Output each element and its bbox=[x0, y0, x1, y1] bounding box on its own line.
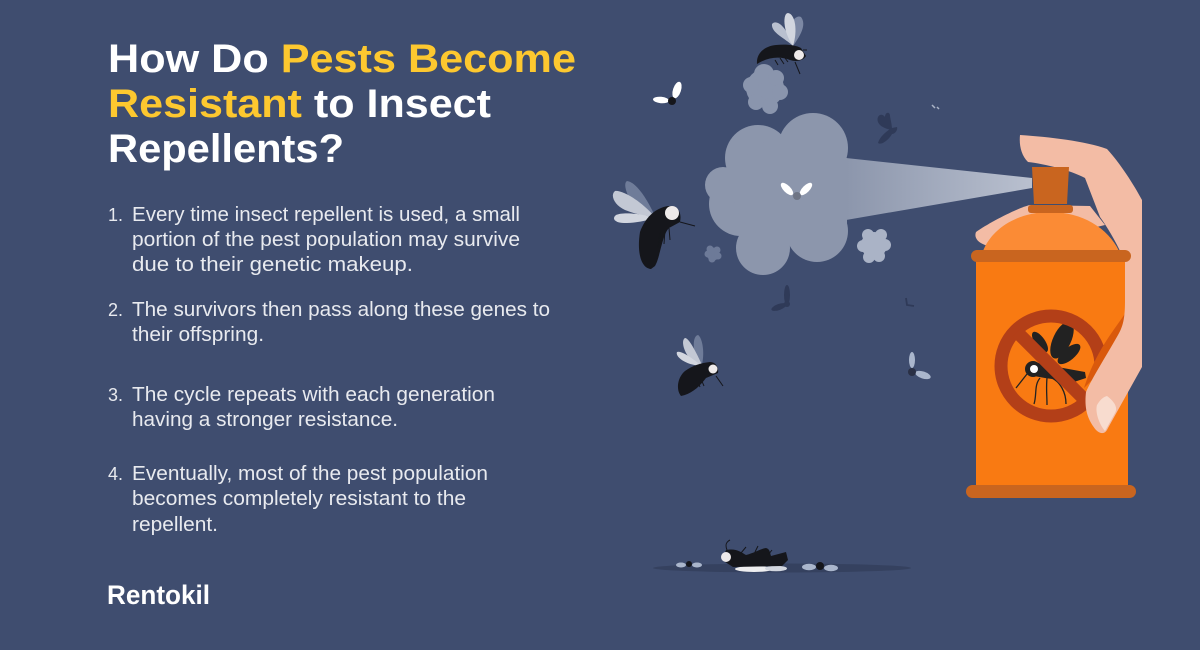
step 3 text: having a stronger resistance. bbox=[132, 409, 398, 431]
tiny dark fly bbox=[906, 298, 914, 306]
spray cloud and cone bbox=[705, 113, 1032, 275]
collar bbox=[1028, 205, 1073, 213]
dead fly right bbox=[802, 562, 838, 571]
step 1 text: 1. bbox=[108, 205, 123, 225]
title bbox=[108, 37, 576, 171]
title: How Do Pests Become bbox=[108, 37, 576, 81]
step 2 text: 2. bbox=[108, 300, 123, 320]
fingernail bbox=[1096, 396, 1116, 431]
fly right bbox=[908, 352, 932, 381]
can base bbox=[966, 485, 1136, 498]
mosquito left large bbox=[613, 181, 695, 269]
dark fly faded middle bbox=[770, 285, 790, 313]
can ring bbox=[971, 250, 1131, 262]
step 1 text: due to their genetic makeup. bbox=[132, 254, 413, 276]
hand front bbox=[1020, 135, 1142, 433]
fly white small bbox=[653, 81, 683, 105]
step 4 text: 4. bbox=[108, 464, 123, 484]
step 2 text: The survivors then pass along these genes to bbox=[132, 299, 550, 321]
step 3 text: The cycle repeats with each generation bbox=[132, 384, 495, 406]
finger shadow on can bbox=[1084, 312, 1127, 388]
fly inside cloud bbox=[779, 181, 814, 200]
dark fly faded top bbox=[878, 113, 897, 144]
small cloud right bbox=[857, 229, 891, 263]
title: Resistant to Insect bbox=[108, 82, 491, 126]
step 4 text: repellent. bbox=[132, 514, 218, 536]
mosquito top bbox=[757, 13, 807, 74]
step 3 text: 3. bbox=[108, 385, 123, 405]
step 1 text: portion of the pest population may survive bbox=[132, 229, 520, 251]
tiny fly top right bbox=[932, 105, 939, 109]
tiny cloud bbox=[704, 246, 722, 262]
small cloud top bbox=[743, 64, 788, 114]
step 2 text bbox=[108, 299, 550, 346]
mosquito on label bbox=[1016, 318, 1086, 405]
hand back thumb behind can bbox=[975, 205, 1105, 250]
title: Repellents? bbox=[108, 127, 344, 171]
step 1 text bbox=[108, 204, 520, 276]
dead fly left bbox=[676, 561, 702, 568]
prohibition sign bbox=[1001, 316, 1101, 416]
mosquito lower bbox=[677, 335, 723, 396]
ground shadow bbox=[653, 564, 911, 572]
nozzle bbox=[1032, 167, 1069, 204]
dead mosquito bbox=[721, 540, 788, 572]
logo: Rentokil: Rentokil bbox=[107, 580, 210, 610]
step 4 text bbox=[108, 463, 488, 536]
step 2 text: their offspring. bbox=[132, 324, 264, 346]
spray can body bbox=[966, 205, 1136, 498]
step 4 text: becomes completely resistant to the bbox=[132, 488, 466, 510]
step 3 text bbox=[108, 384, 495, 431]
step 4 text: Eventually, most of the pest population bbox=[132, 463, 488, 485]
can dome bbox=[983, 212, 1119, 251]
can body bbox=[976, 260, 1128, 487]
step 1 text: Every time insect repellent is used, a small bbox=[132, 204, 520, 226]
